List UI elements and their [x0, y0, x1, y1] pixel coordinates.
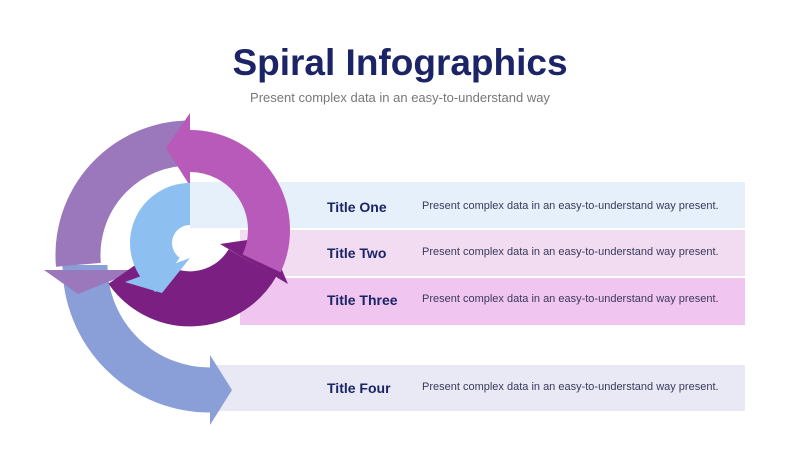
arrow: periwinkle [85, 265, 232, 425]
row: title four: Title Four [327, 380, 391, 396]
row: title four: Present complex data in an easy-to-understand way present. [422, 381, 719, 393]
bar backgrounds [190, 182, 745, 411]
arrow: magenta [166, 113, 269, 263]
row: title three: Present complex data in an easy-to-understand way present. [422, 293, 719, 305]
row: title four [327, 380, 719, 396]
title: Spiral Infographics [232, 42, 568, 83]
subtitle: Present complex data in an easy-to-understand way [250, 90, 550, 105]
row: title two: Title Two [327, 245, 386, 261]
arrow: dark purple [131, 237, 288, 299]
row: title two [327, 245, 719, 261]
arrow: light blue [125, 204, 190, 293]
arrow: purple [44, 143, 190, 294]
row: title one: Present complex data in an easy-to-understand way present. [422, 200, 719, 212]
row: title one: Title One [327, 199, 387, 215]
row: title three: Title Three [327, 292, 398, 308]
row: title three [327, 292, 719, 308]
row: title two: Present complex data in an easy-to-understand way present. [422, 246, 719, 258]
row: title one [327, 199, 719, 215]
